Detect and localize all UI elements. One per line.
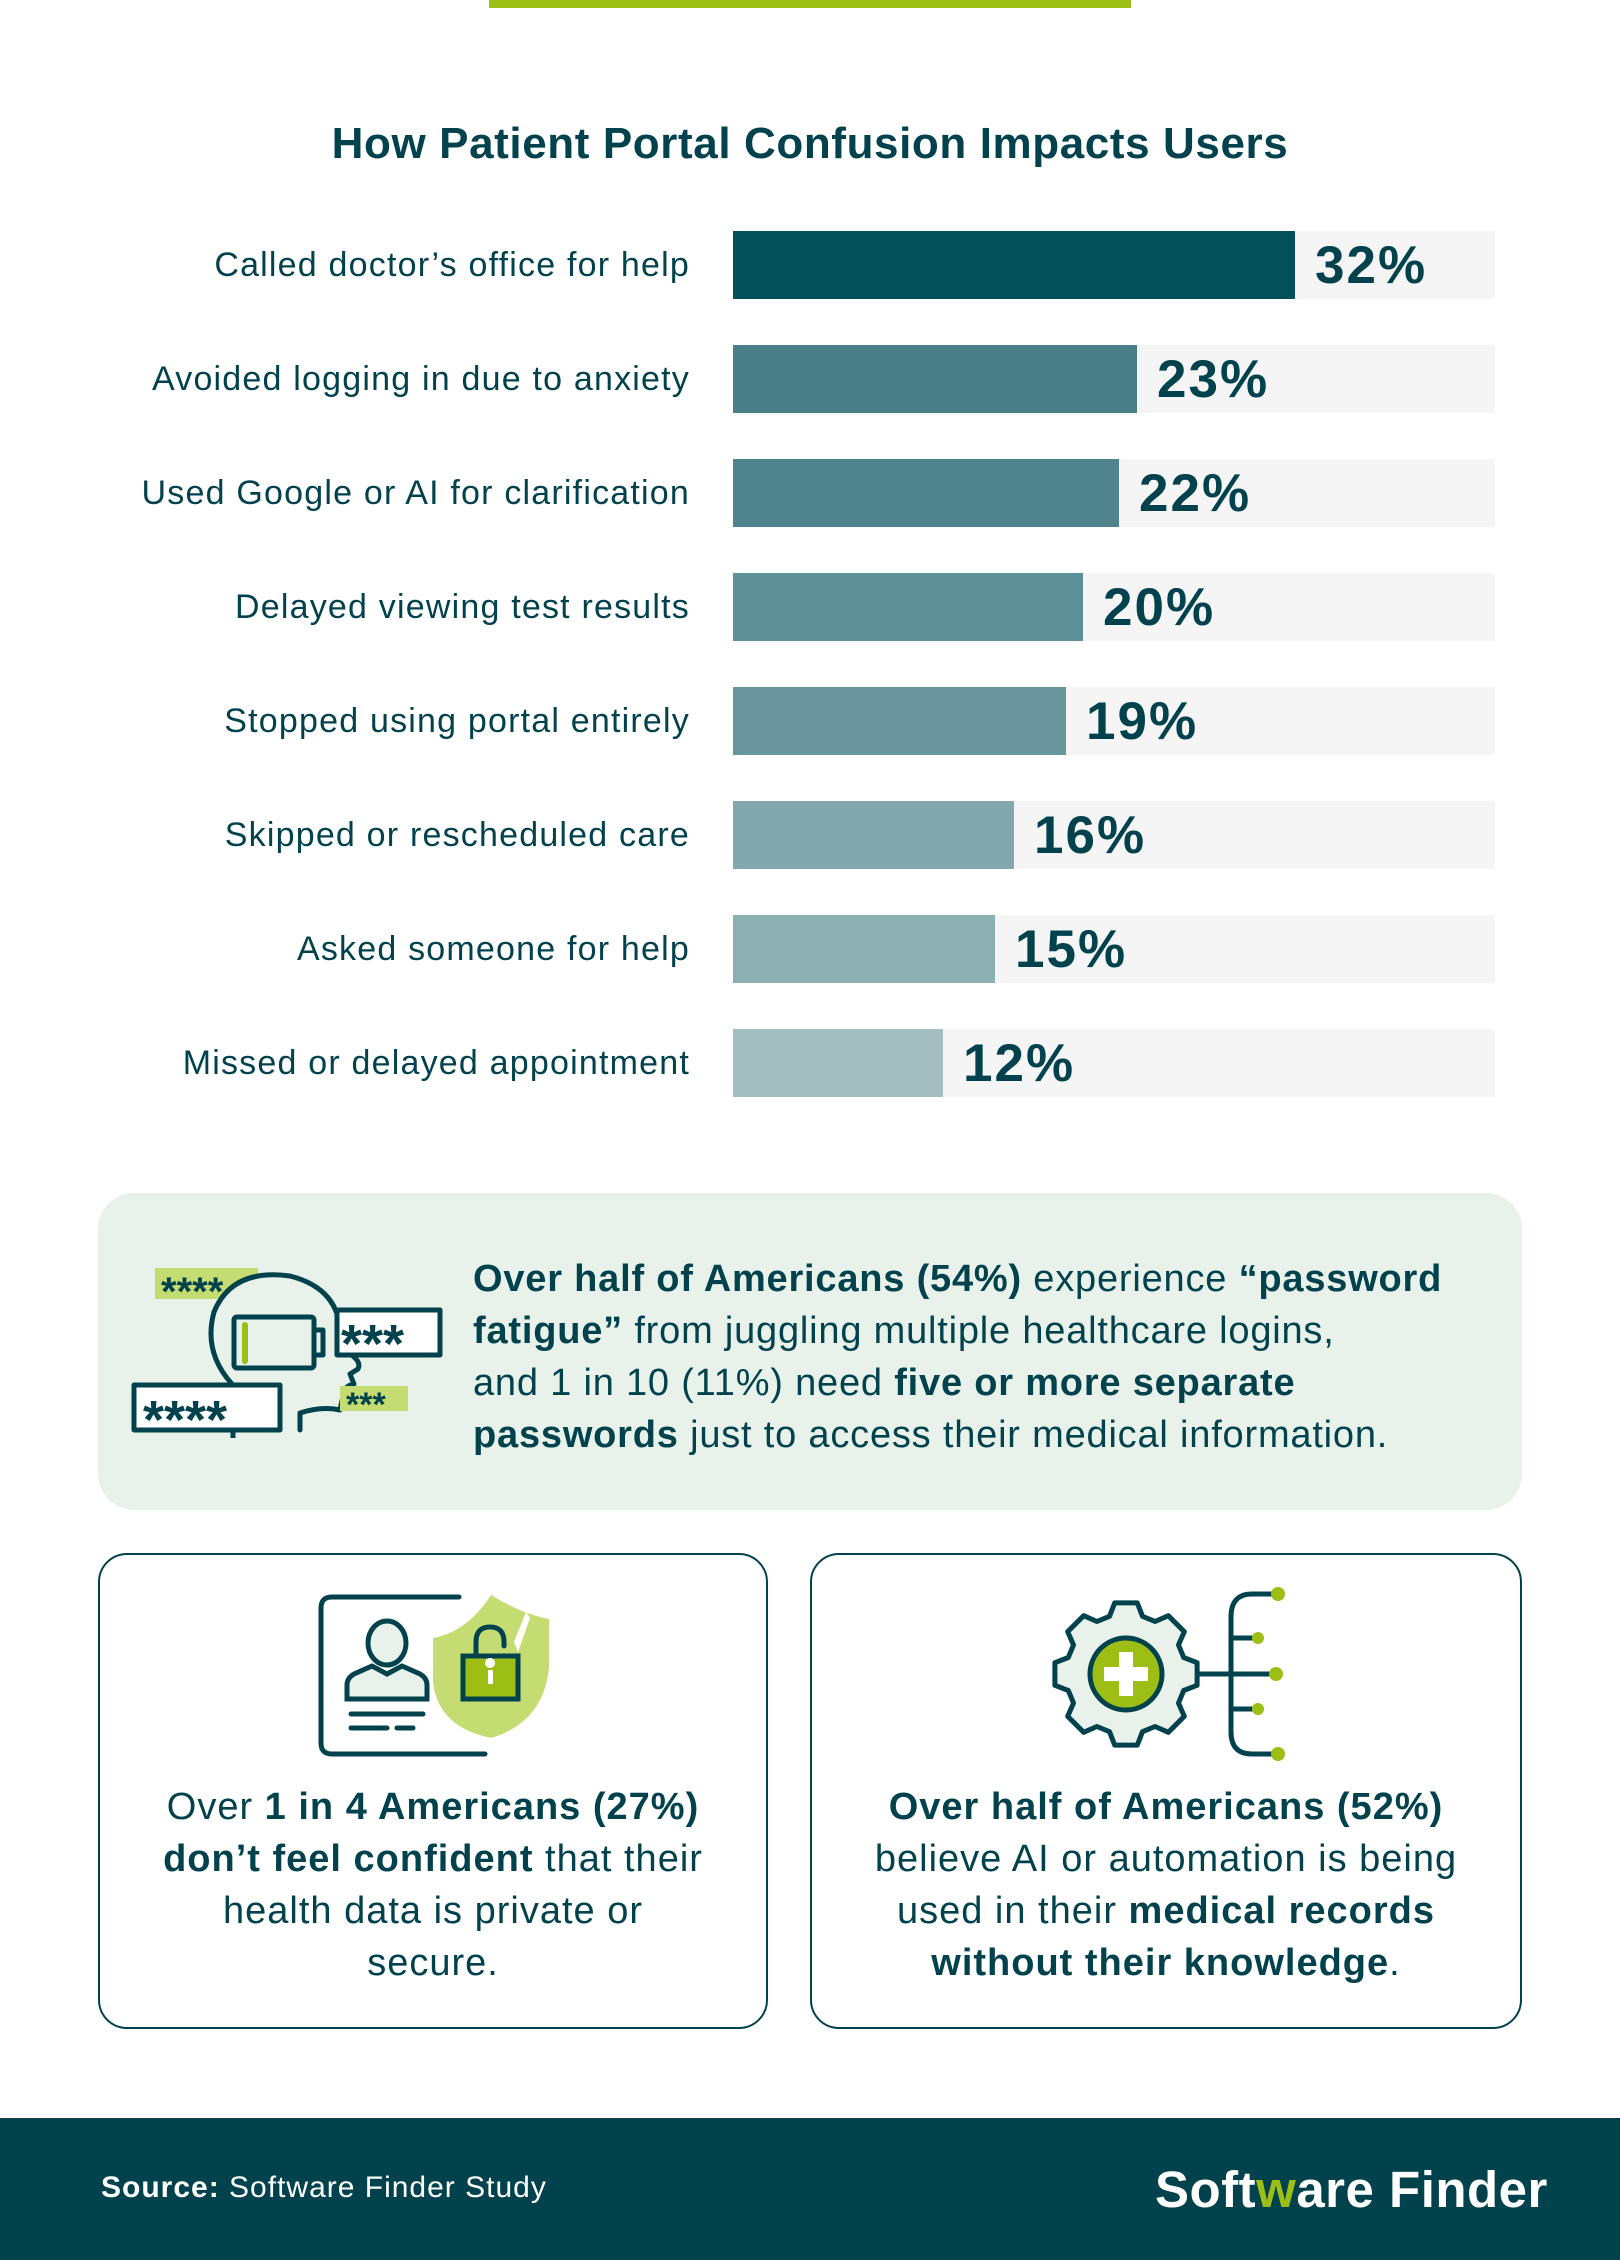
row 5: Stopped using portal entirely — [224, 702, 690, 740]
row 4 — [235, 573, 1495, 641]
icon: head with passwords: *** — [346, 1386, 386, 1424]
bar chart — [142, 231, 1495, 1097]
row 7: 15% — [1015, 920, 1127, 979]
title: How Patient Portal Confusion Impacts Users — [332, 119, 1288, 168]
callout text: Over half of Americans (54%) experience “password — [473, 1258, 1442, 1300]
card text: Over 1 in 4 Americans (27%) — [167, 1786, 699, 1828]
row 3: 22% — [1139, 464, 1251, 523]
row 8: 12% — [963, 1034, 1075, 1093]
row 3: Used Google or AI for clarification — [142, 474, 690, 512]
row 4: 20% — [1103, 578, 1215, 637]
icon: head with passwords — [132, 1268, 442, 1438]
card text — [163, 1786, 703, 1984]
callout text: passwords just to access their medical information. — [473, 1414, 1388, 1456]
card text: health data is private or — [223, 1890, 643, 1932]
logo: Software Finder — [1155, 2161, 1548, 2218]
row 4: Delayed viewing test results — [235, 588, 690, 626]
row 1 — [214, 231, 1495, 299]
row 5: 19% — [1086, 692, 1198, 751]
card text: without their knowledge. — [931, 1942, 1401, 1984]
row 1: Called doctor’s office for help — [214, 246, 690, 284]
source text: Source: Software Finder Study — [101, 2171, 547, 2204]
row 7: Asked someone for help — [297, 930, 690, 968]
row 6: Skipped or rescheduled care — [225, 816, 690, 854]
row 6: 16% — [1034, 806, 1146, 865]
icon: gear with medical cross and network — [1052, 1587, 1285, 1761]
callout text — [473, 1258, 1442, 1456]
card text: believe AI or automation is being — [875, 1838, 1457, 1880]
row 2: Avoided logging in due to anxiety — [152, 360, 690, 398]
footer — [0, 2118, 1620, 2260]
card text: used in their medical records — [897, 1890, 1435, 1932]
row 7 — [297, 915, 1495, 983]
card: AI in records — [810, 1553, 1522, 2029]
callout text: fatigue” from juggling multiple healthcare logins, — [473, 1310, 1335, 1352]
row 2 — [152, 345, 1495, 413]
row 2: 23% — [1157, 350, 1269, 409]
card text: don’t feel confident that their — [163, 1838, 703, 1880]
card text — [875, 1786, 1457, 1984]
row 3 — [142, 459, 1495, 527]
icon: id card with shield lock — [318, 1594, 549, 1756]
icon: head with passwords: *** — [341, 1314, 404, 1374]
icon: head with passwords: **** — [161, 1270, 224, 1314]
row 6 — [225, 801, 1495, 869]
callout text: and 1 in 10 (11%) need five or more separate — [473, 1362, 1295, 1404]
row 8 — [183, 1029, 1495, 1097]
row 8: Missed or delayed appointment — [183, 1044, 690, 1082]
row 5 — [224, 687, 1495, 755]
card text: secure. — [367, 1942, 499, 1984]
card text: Over half of Americans (52%) — [889, 1786, 1443, 1828]
callout panel: password fatigue — [98, 1193, 1522, 1510]
top accent bar — [489, 0, 1131, 8]
row 1: 32% — [1315, 236, 1427, 295]
card: privacy confidence — [98, 1553, 768, 2029]
